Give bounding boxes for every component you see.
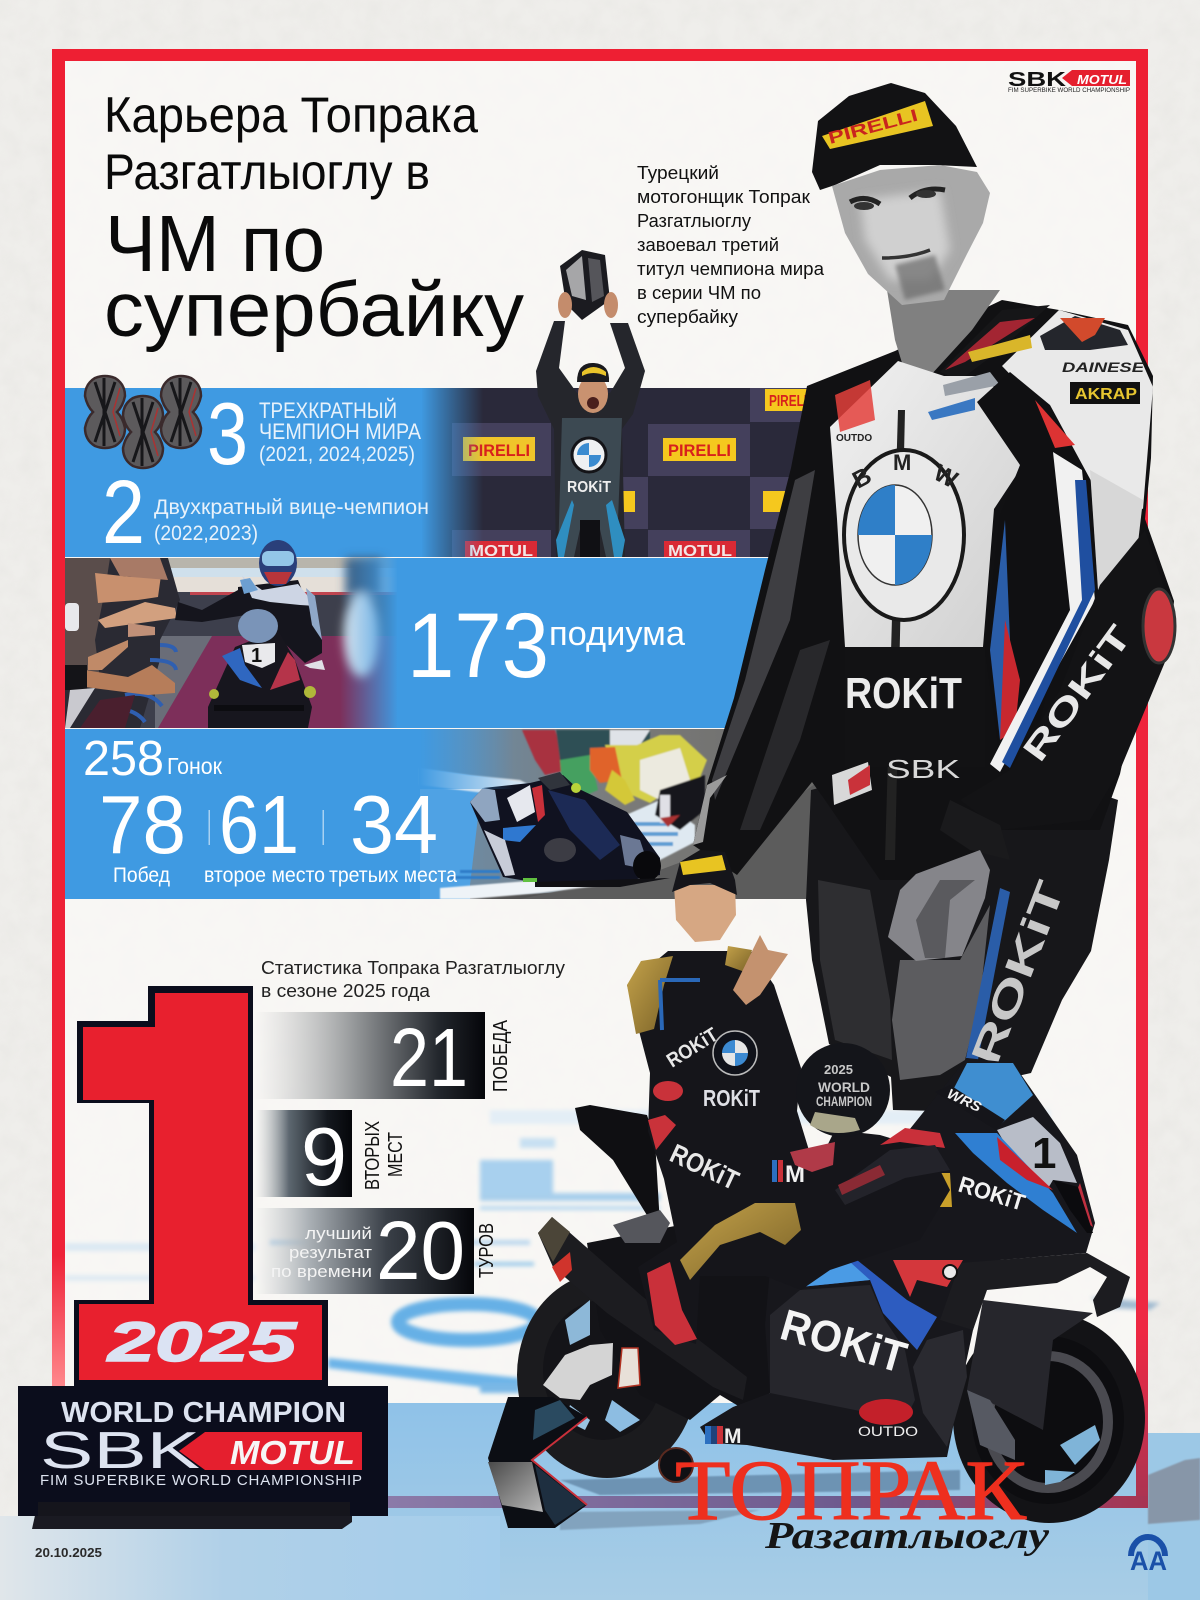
photo: rider holding trophy: ROKiT bbox=[567, 479, 611, 496]
left arm and main body bbox=[693, 300, 1174, 880]
elbow red bbox=[653, 1081, 683, 1101]
helmet: 2025 bbox=[824, 1062, 853, 1077]
Motul text: MOTUL bbox=[230, 1434, 355, 1471]
rider name: script Разгатлыоглу: Разгатлыоглу bbox=[764, 1515, 1049, 1557]
handlebar bbox=[835, 1145, 950, 1205]
stat bar: 20 fastest laps: 20 bbox=[376, 1204, 465, 1297]
windscreen sticker strip bbox=[935, 1085, 1005, 1130]
rear frame and engine mass bbox=[587, 1225, 800, 1420]
rear wheel bbox=[517, 1272, 697, 1478]
intro text block: титул чемпиона мира bbox=[637, 258, 825, 279]
hip red bbox=[648, 1115, 676, 1150]
thigh text ROKiT: ROKiT bbox=[665, 1138, 744, 1196]
intro text block: Разгатлыоглу bbox=[637, 210, 752, 231]
number outline bbox=[74, 986, 328, 1386]
photo: motorcycle with seated rider: OUTDO bbox=[858, 1423, 918, 1439]
middle leg gray bbox=[892, 905, 990, 1080]
shoulder yellow badge bbox=[968, 335, 1032, 362]
stat: three-time champion: 3 bbox=[207, 384, 248, 483]
trophy bbox=[560, 250, 610, 320]
rider name: surname ТОПРАК: ТОПРАК bbox=[675, 1442, 1027, 1538]
inner sleeve black and red bbox=[977, 372, 1098, 760]
belly black bbox=[845, 647, 985, 767]
background: racetrack with blue markings bbox=[0, 1110, 1200, 1600]
arm stripes bbox=[990, 452, 1095, 772]
side text ROKiT: ROKiT bbox=[775, 1301, 912, 1383]
stat: three-time champion: ЧЕМПИОН МИРА bbox=[259, 419, 421, 444]
radiator bbox=[913, 1330, 967, 1447]
face bbox=[832, 165, 990, 305]
SBK Motul logo: FIM SUPERBIKE WORLD CHAMPIONSHIP bbox=[1008, 88, 1130, 94]
icon: Anadolu Agency logo: AA bbox=[1130, 1546, 1167, 1576]
photo: large rider portrait: OUTDO bbox=[836, 433, 872, 444]
intro text block: в серии ЧМ по bbox=[637, 282, 761, 303]
season statistics heading: Статистика Топрака Разгатлыоглу bbox=[261, 957, 566, 978]
stat: three-time champion: (2021, 2024,2025) bbox=[259, 443, 415, 466]
badge stand front bbox=[38, 1502, 350, 1516]
BMW roundel: M bbox=[893, 450, 911, 475]
stat: three-time champion: ТРЕХКРАТНЫЙ bbox=[259, 398, 397, 423]
intro text block: мотогонщик Топрак bbox=[637, 186, 811, 207]
gold knee bbox=[680, 1203, 801, 1280]
photo: podium backdrop: PIRELLI bbox=[668, 441, 731, 460]
exhaust logo bbox=[552, 1252, 572, 1282]
blue chevrons bbox=[110, 645, 176, 722]
glove cuff bbox=[940, 800, 1010, 860]
intro text block bbox=[637, 162, 825, 327]
photo: large rider portrait: PIRELLI bbox=[826, 106, 920, 148]
fairing black nose bbox=[1053, 1180, 1093, 1233]
bmw m stripes on leg bbox=[772, 1160, 805, 1188]
intro text block: Турецкий bbox=[637, 162, 719, 183]
small rider body bbox=[627, 951, 950, 1344]
fairing red bbox=[997, 1137, 1053, 1190]
panel: races photo band bbox=[65, 729, 820, 899]
pack of bikes behind bbox=[522, 730, 568, 775]
head bbox=[577, 363, 609, 413]
fairing gray nose bbox=[997, 1117, 1077, 1190]
shoulder text: DAINESE bbox=[1062, 359, 1145, 375]
title line 4: супербайку bbox=[104, 267, 525, 353]
badges on chest bbox=[835, 380, 875, 432]
BMW roundel: B bbox=[848, 462, 876, 494]
bmw m stripes bottom: M bbox=[724, 1425, 742, 1448]
Pirelli sticker bbox=[998, 1306, 1040, 1328]
stat: 258 races: 258 bbox=[83, 732, 164, 786]
stat bar: 21 wins bbox=[255, 1011, 512, 1104]
side carbon panel bbox=[770, 1285, 915, 1420]
silver rear hub bbox=[543, 1343, 613, 1400]
stat: three-time champion bbox=[207, 384, 421, 483]
arm text ROKiT: ROKiT bbox=[663, 1024, 722, 1072]
silver subframe bbox=[613, 1210, 670, 1243]
photo: rider holding trophy bbox=[536, 250, 645, 557]
cap yellow logo bbox=[822, 101, 933, 149]
front wheel bbox=[953, 1313, 1145, 1523]
elbow slider bbox=[1143, 589, 1175, 663]
helmet: WORLD bbox=[818, 1079, 870, 1095]
chest blue line bbox=[660, 980, 700, 1030]
title line 2: Разгатлыоглу в bbox=[104, 144, 430, 200]
front fork and fender bbox=[967, 1300, 1093, 1430]
stat bar: 20 fastest laps: результат bbox=[289, 1243, 372, 1262]
world champion badge bbox=[18, 1386, 388, 1529]
title line 1: Карьера Топрака bbox=[104, 87, 478, 143]
stat: 34 third places bbox=[322, 778, 457, 887]
neck bbox=[887, 290, 1000, 376]
number one: 1 bbox=[1032, 1129, 1056, 1178]
stat: 34 third places: третьих места bbox=[329, 864, 457, 887]
sleeve text ROKiT: ROKiT bbox=[1016, 618, 1140, 769]
rider on bike: 1 bbox=[251, 645, 262, 667]
side red panel bbox=[893, 1260, 963, 1297]
side blue panel bbox=[777, 1257, 937, 1350]
right shoulder white bbox=[1002, 310, 1153, 509]
big number one bbox=[74, 986, 328, 1386]
bmw m stripes on leg: M bbox=[785, 1161, 805, 1188]
bike body bbox=[700, 1058, 1095, 1460]
rider on bike bbox=[175, 540, 325, 728]
trophy on the ground bbox=[488, 1397, 587, 1528]
icon: three trophies bbox=[85, 376, 201, 468]
photo: fans and rider bbox=[65, 540, 410, 728]
stat bar: 20 fastest laps: по времени bbox=[271, 1262, 372, 1281]
photo: podium backdrop bbox=[422, 388, 820, 560]
blurred rider on right bbox=[344, 558, 382, 677]
arm highlights bbox=[712, 470, 815, 800]
front zipper bbox=[885, 410, 905, 860]
stat: 61 second places: 61 bbox=[219, 778, 299, 871]
left leg shading bbox=[818, 880, 892, 1060]
intro text block: супербайку bbox=[637, 306, 739, 327]
small rider head bbox=[674, 885, 736, 942]
BMW roundel bbox=[844, 450, 964, 620]
season statistics heading bbox=[261, 957, 566, 1001]
helmet bbox=[796, 1043, 890, 1137]
championship text: FIM SUPERBIKE WORLD CHAMPIONSHIP bbox=[40, 1472, 362, 1489]
sprocket bbox=[659, 1448, 693, 1482]
large rider boot on bike bbox=[880, 1128, 945, 1148]
season statistics heading: в сезоне 2025 года bbox=[261, 980, 431, 1001]
helmet: CHAMPION bbox=[816, 1093, 872, 1109]
photo: podium backdrop: PIRELLI bbox=[468, 441, 530, 460]
number fill bbox=[79, 993, 322, 1380]
stat bar: 9 second places: МЕСТ bbox=[385, 1132, 407, 1177]
photo: podium backdrop: MOTUL bbox=[668, 543, 732, 560]
SBK Motul logo: MOTUL bbox=[1077, 72, 1127, 87]
hand bbox=[888, 850, 990, 961]
windscreen sticker: WRS bbox=[945, 1085, 985, 1115]
stat: 258 races: Гонок bbox=[167, 753, 223, 779]
photo: race track and bikes bbox=[420, 729, 820, 899]
shoulder dark cap bbox=[1040, 316, 1128, 350]
fairing blue bbox=[955, 1133, 1077, 1233]
photo: motorcycle with seated rider bbox=[517, 850, 1145, 1523]
windscreen bbox=[953, 1063, 1033, 1125]
bmw mini logo bbox=[943, 1265, 957, 1279]
world champion text: WORLD CHAMPION bbox=[61, 1397, 346, 1429]
BMW roundel: W bbox=[929, 459, 962, 494]
stat: two-time vice champion bbox=[102, 463, 429, 563]
badge on waist bbox=[832, 762, 872, 805]
photo: podium backdrop: PIRELL bbox=[769, 393, 811, 410]
stat: two-time vice champion: 2 bbox=[102, 463, 145, 563]
gold fork tube bbox=[932, 1173, 952, 1207]
small rider gold shoulder bbox=[627, 956, 673, 1034]
stat: two-time vice champion: (2022,2023) bbox=[154, 522, 258, 545]
belly text ROKiT: ROKiT bbox=[845, 669, 962, 718]
intro text block: завоевал третий bbox=[637, 234, 779, 255]
stat bar: 21 wins: 21 bbox=[390, 1011, 468, 1104]
photo: large rider portrait: AKRAP bbox=[1075, 386, 1137, 403]
collar bbox=[940, 305, 1050, 380]
date: 20.10.2025 bbox=[35, 1545, 102, 1560]
cap bbox=[812, 83, 977, 190]
forearm dark bbox=[960, 530, 1170, 830]
leading bike bbox=[470, 772, 670, 887]
small rider hand bbox=[733, 935, 788, 1005]
small BMW logo bbox=[713, 1031, 757, 1075]
hands bbox=[558, 292, 618, 318]
Outdo logo bbox=[859, 1399, 913, 1425]
stat: 173 podiums: подиума bbox=[549, 615, 685, 653]
SBK Motul logo: SBK bbox=[1008, 69, 1067, 91]
torso white bbox=[830, 361, 1021, 647]
stat: 173 podiums: 173 bbox=[407, 595, 549, 697]
legs bbox=[806, 760, 1118, 1111]
leg text ROKiT: ROKiT bbox=[963, 875, 1074, 1071]
title line 3: ЧМ по bbox=[105, 199, 325, 288]
badge plate bbox=[18, 1386, 388, 1516]
stat: 61 second places bbox=[204, 778, 325, 887]
eyes and mouth bbox=[850, 189, 945, 204]
stat: 258 races bbox=[83, 732, 223, 786]
panel: podium photo band bbox=[65, 388, 820, 560]
title bbox=[104, 87, 525, 353]
stat bar: 21 wins: ПОБЕДА bbox=[490, 1019, 512, 1092]
photo: podium backdrop: MOTUL bbox=[469, 543, 533, 560]
red Motul chevron bbox=[179, 1432, 362, 1470]
exhaust bbox=[538, 1217, 747, 1400]
brake caliper bbox=[967, 1390, 1015, 1460]
year 2025: 2025 bbox=[106, 1310, 297, 1373]
badge stand bbox=[32, 1502, 352, 1529]
tail bbox=[575, 1105, 660, 1225]
panel: podiums photo band bbox=[65, 540, 774, 728]
photo: large rider portrait bbox=[693, 83, 1175, 1111]
stat bar: 20 fastest laps: лучший bbox=[305, 1224, 372, 1243]
stat: 78 wins: Побед bbox=[113, 864, 170, 887]
stat bar: 9 second places: 9 bbox=[301, 1110, 347, 1203]
winglet bbox=[940, 1253, 1130, 1330]
fairing text ROKiT: ROKiT bbox=[956, 1171, 1028, 1216]
chest text ROKiT: ROKiT bbox=[703, 1085, 760, 1111]
SBK Motul logo bbox=[1008, 69, 1130, 94]
stat: 173 podiums bbox=[407, 595, 685, 697]
small rider cap bbox=[672, 850, 737, 895]
stat bar: 9 second places bbox=[255, 1110, 407, 1203]
stat bar: 20 fastest laps bbox=[255, 1204, 498, 1297]
belly text SBK: SBK bbox=[886, 754, 961, 784]
stat: 61 second places: второе место bbox=[204, 864, 325, 887]
stat: 34 third places: 34 bbox=[350, 778, 438, 871]
SBK logo letters: SBK bbox=[40, 1422, 200, 1480]
stat bar: 9 second places: ВТОРЫХ bbox=[362, 1121, 384, 1190]
tank colours bbox=[790, 1142, 835, 1172]
stat: two-time vice champion: Двухкратный вице-чемпион bbox=[154, 496, 429, 519]
number one plate bbox=[618, 1348, 640, 1388]
bmw m stripes bottom bbox=[705, 1425, 742, 1448]
cuff edge bbox=[693, 775, 727, 845]
fans arms bbox=[65, 558, 177, 728]
forearm perforated white bbox=[1090, 470, 1143, 590]
leg stripe bbox=[966, 888, 1010, 1060]
stat bar: 20 fastest laps: ТУРОВ bbox=[476, 1223, 498, 1278]
stat: 78 wins: 78 bbox=[99, 778, 186, 871]
red boot bbox=[647, 1262, 697, 1345]
